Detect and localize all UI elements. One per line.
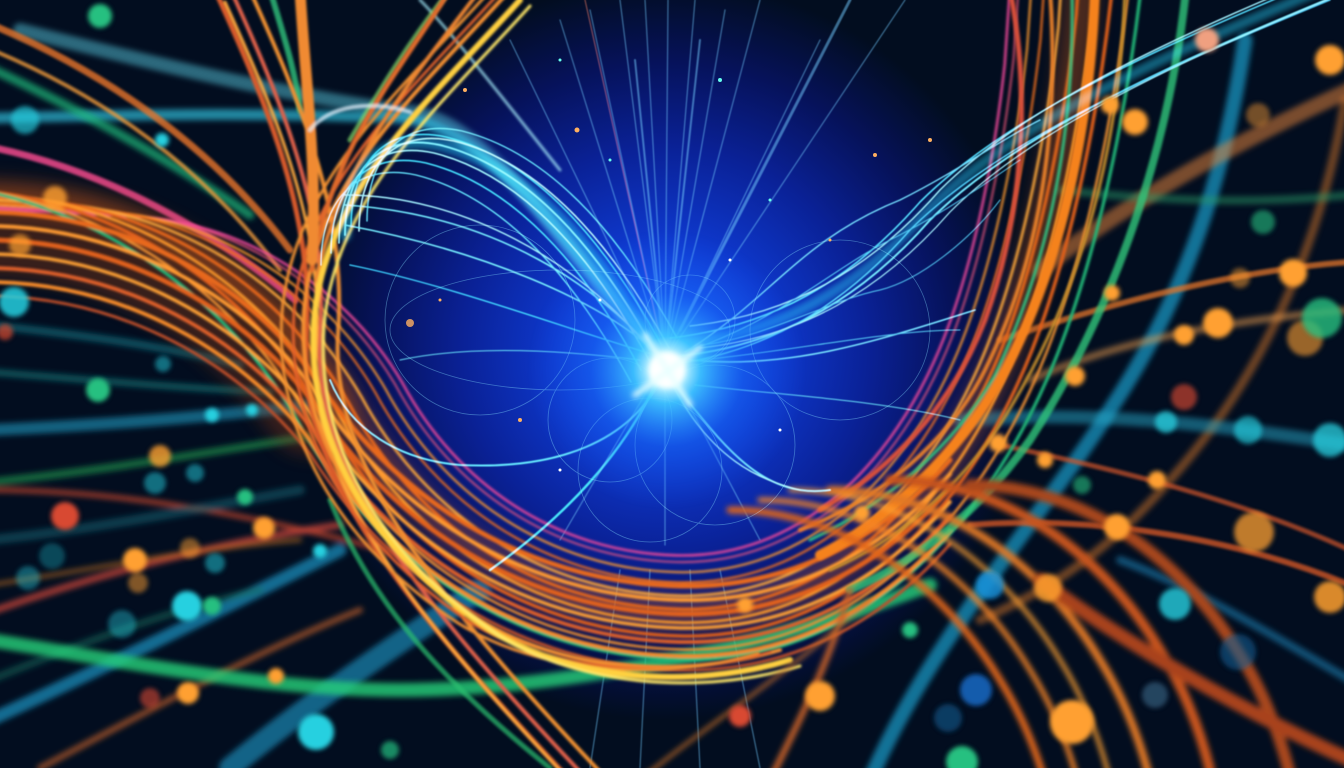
small sparks in the blue field (406, 58, 932, 472)
radial fine rays above the core (510, 0, 905, 768)
left orange bundle sweeping in from the edge (0, 20, 310, 410)
thin circular filaments below and around the core (385, 225, 930, 542)
dark teal streaks on the left side (0, 325, 480, 768)
cyan loops and filaments around the core (321, 0, 1344, 570)
green band along the bottom (0, 500, 930, 768)
orange and yellow strands falling from the top (215, 0, 800, 768)
orange bowl of concentric arcs (0, 0, 1157, 670)
orange, green and pink right-side vertical arcs (800, 0, 1186, 590)
bright white core (527, 230, 807, 510)
right side background bands (870, 40, 1344, 768)
lower right orange fan (640, 480, 1344, 768)
bokeh particles: red (0, 324, 1197, 727)
top-left cyan-white ribbons (0, 0, 650, 345)
